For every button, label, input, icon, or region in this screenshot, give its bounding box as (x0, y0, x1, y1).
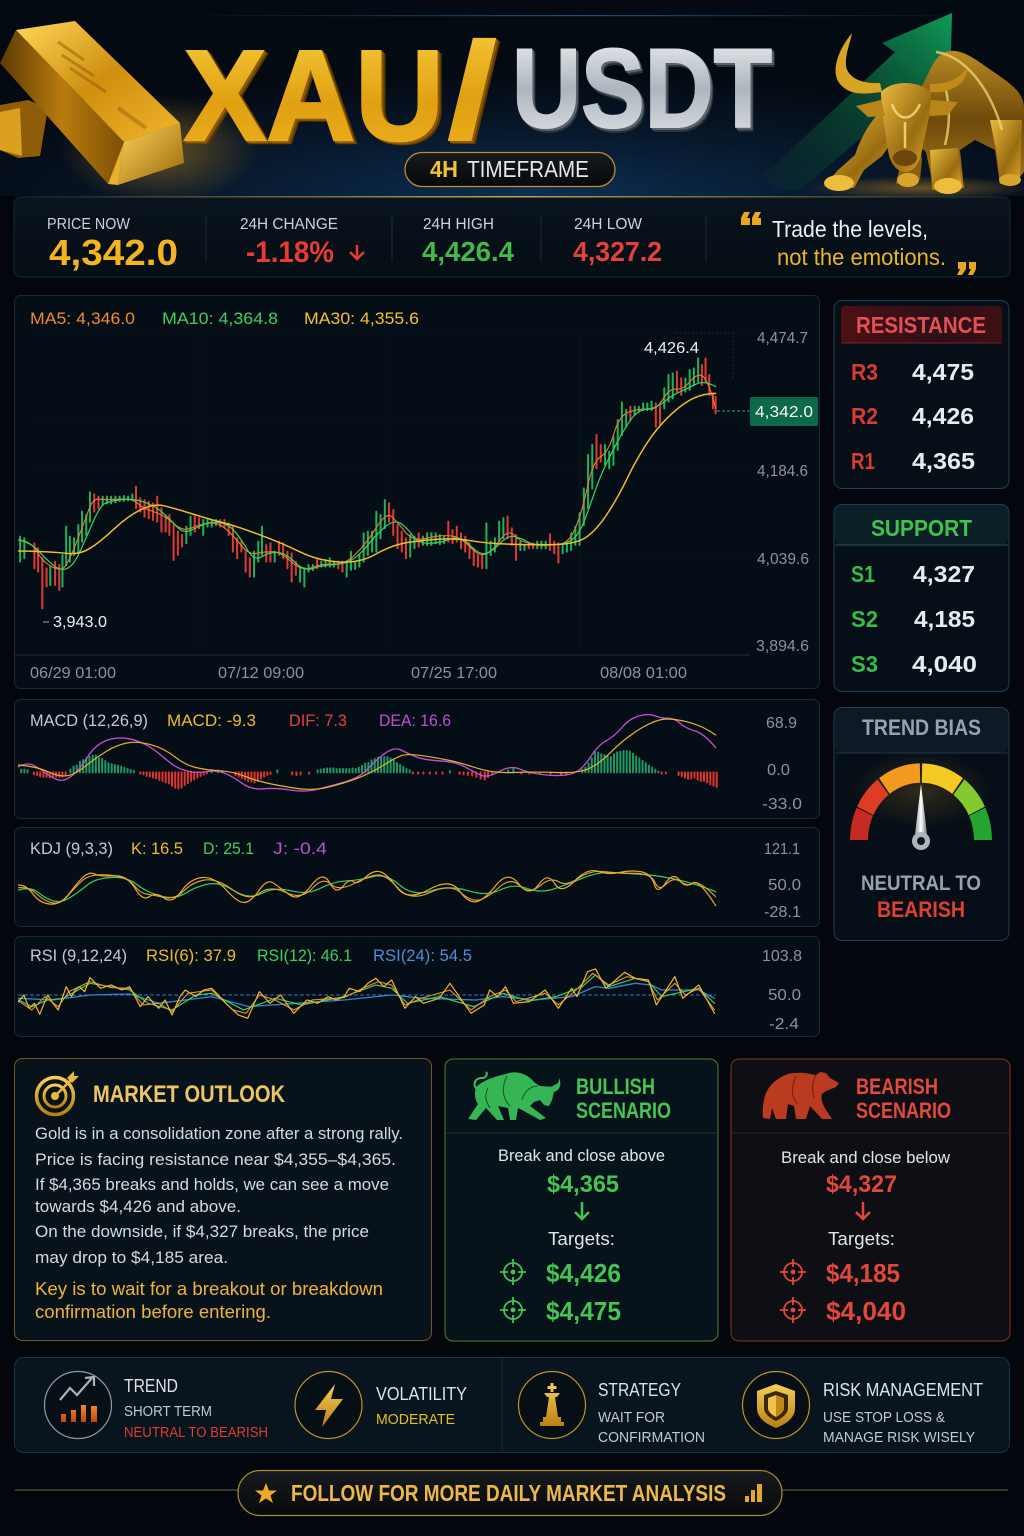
bullish trigger: Targets: (548, 1229, 615, 1249)
price axis: 4,039.6 (757, 551, 809, 568)
outlook body text: On the downside, if $4,327 breaks, the price (35, 1222, 369, 1241)
panel: resistance (834, 300, 1009, 488)
panel: RSI (14, 936, 820, 1036)
MACD legend: DEA: 16.6 (379, 711, 451, 730)
summary: volatility: VOLATILITY (376, 1384, 467, 1404)
panel: summary strip (14, 1358, 1010, 1452)
bullish trigger: $4,365 (547, 1171, 619, 1198)
summary: strategy: STRATEGY (598, 1380, 681, 1400)
icon: target (36, 1071, 79, 1114)
support levels: S1 (851, 561, 875, 587)
bullish target 1 (500, 1258, 621, 1288)
bearish trigger: $4,327 (826, 1171, 897, 1198)
KDJ legend: J: -0.4 (273, 839, 327, 858)
moving average legend: MA5: 4,346.0 (30, 309, 135, 328)
RSI axis: -2.4 (769, 1016, 799, 1033)
time axis (30, 665, 687, 682)
moving average legend: MA30: 4,355.6 (304, 309, 419, 328)
resistance heading: RESISTANCE (856, 312, 986, 338)
MACD legend: MACD: -9.3 (167, 711, 256, 730)
moving average legend (30, 309, 419, 328)
panel: KDJ (14, 828, 820, 926)
summary: risk management: MANAGE RISK WISELY (823, 1429, 975, 1446)
outlook heading: MARKET OUTLOOK (93, 1081, 286, 1108)
resistance levels (851, 359, 975, 474)
bullish heading: SCENARIO (576, 1098, 671, 1123)
bullish target 1: $4,426 (546, 1258, 621, 1288)
panel: MACD (14, 700, 820, 818)
KDJ legend: KDJ (9,3,3) (30, 839, 113, 858)
RSI legend: RSI(12): 46.1 (257, 946, 352, 965)
support levels (851, 561, 977, 677)
bullish heading: BULLISH (576, 1074, 655, 1099)
price axis (756, 330, 809, 655)
outlook body text: Gold is in a consolidation zone after a strong rally. (35, 1124, 403, 1143)
resistance levels: 4,365 (912, 448, 975, 474)
panel: support (834, 504, 1009, 692)
bearish target 1: $4,185 (826, 1258, 900, 1288)
stat: 24h high (422, 216, 514, 267)
stat: 24h low: 4,327.2 (573, 236, 662, 267)
RSI legend: RSI(24): 54.5 (373, 946, 472, 965)
panel: price chart (14, 296, 820, 688)
RSI axis: 103.8 (762, 948, 802, 965)
summary: strategy: CONFIRMATION (598, 1429, 705, 1446)
KDJ axis: 50.0 (768, 877, 801, 894)
outlook key note (35, 1279, 383, 1322)
bearish heading (856, 1074, 951, 1123)
resistance levels: 4,475 (912, 359, 974, 385)
bearish heading: BEARISH (856, 1074, 938, 1099)
summary: risk management: USE STOP LOSS & (823, 1409, 945, 1426)
bullish target 2: $4,475 (546, 1296, 621, 1326)
support levels: 4,040 (912, 651, 977, 677)
summary: risk management: RISK MANAGEMENT (823, 1380, 983, 1400)
panel: market outlook (14, 1058, 432, 1340)
MACD axis: 0.0 (767, 762, 790, 779)
stat: 24h change: -1.18% (246, 236, 334, 269)
stat: 24h low (573, 216, 662, 267)
outlook body text: may drop to $4,185 area. (35, 1248, 228, 1267)
header banner (0, 0, 1024, 205)
quote: Trade the levels, (772, 216, 928, 242)
summary: strategy: WAIT FOR (598, 1409, 665, 1426)
icon: small gold bar (0, 100, 48, 158)
MACD legend: DIF: 7.3 (289, 711, 347, 730)
icon: bars (745, 1484, 762, 1502)
RSI legend (30, 946, 472, 965)
current price tag (717, 397, 818, 426)
KDJ axis (764, 841, 801, 921)
bearish heading: SCENARIO (856, 1098, 951, 1123)
icon: green bull (468, 1072, 560, 1120)
summary: strategy (518, 1372, 705, 1446)
outlook body text (35, 1124, 403, 1267)
resistance levels: 4,426 (912, 403, 974, 429)
MACD legend (30, 711, 451, 730)
outlook body text: towards $4,426 and above. (35, 1197, 241, 1216)
KDJ chart (19, 871, 716, 906)
timeframe pill: TIMEFRAME (467, 156, 589, 182)
bearish target 2 (780, 1296, 906, 1326)
stat: 24h low: 24H LOW (574, 216, 643, 233)
bearish trigger: Targets: (828, 1229, 895, 1249)
footer call to action (15, 1470, 1008, 1516)
stat: price now (47, 216, 178, 273)
RSI chart (19, 969, 716, 1018)
current price tag: 4,342.0 (755, 404, 813, 421)
resistance heading (841, 306, 1002, 343)
bearish target 2: $4,040 (826, 1296, 906, 1326)
moving average legend: MA10: 4,364.8 (162, 309, 278, 328)
stat: price now: 4,342.0 (49, 232, 178, 273)
title: USDT: USDT (512, 26, 772, 151)
quote: not the emotions. (777, 244, 946, 270)
summary: risk management (742, 1372, 983, 1446)
MACD legend: MACD (12,26,9) (30, 711, 148, 730)
KDJ legend: K: 16.5 (131, 839, 183, 858)
MACD axis (762, 715, 802, 813)
title: / (448, 15, 496, 166)
KDJ legend (30, 839, 327, 858)
bullish trigger (498, 1146, 665, 1249)
panel: bearish scenario (731, 1059, 1010, 1341)
call to action text: FOLLOW FOR MORE DAILY MARKET ANALYSIS (291, 1480, 726, 1506)
RSI legend: RSI (9,12,24) (30, 946, 127, 965)
icon: green up arrow (764, 13, 952, 190)
panel: trend bias (834, 708, 1009, 940)
bull head (881, 83, 931, 172)
bullish heading (576, 1074, 671, 1123)
bull body (900, 51, 1024, 190)
high price label (644, 333, 733, 380)
summary: volatility (295, 1372, 467, 1438)
bearish target 1 (780, 1258, 900, 1288)
title: XAU (184, 24, 444, 168)
panel: bullish scenario (445, 1059, 718, 1341)
summary: trend: TREND (124, 1376, 178, 1396)
summary: trend (44, 1372, 268, 1441)
time axis: 06/29 01:00 (30, 665, 116, 682)
bearish trigger: Break and close below (781, 1148, 951, 1167)
stat: 24h change (240, 216, 364, 269)
quote (741, 212, 976, 275)
bullish target 2 (500, 1296, 621, 1326)
KDJ axis: -28.1 (764, 904, 801, 921)
time axis: 07/12 09:00 (218, 665, 304, 682)
bull horns (836, 33, 882, 94)
stats bar (14, 196, 1010, 277)
icon: golden bull (824, 33, 1024, 194)
gauge needle (912, 784, 930, 850)
trend bias verdict: NEUTRAL TO (861, 872, 981, 895)
trend bias verdict: BEARISH (877, 897, 965, 922)
KDJ axis: 121.1 (764, 841, 800, 858)
low price label: 3,943.0 (53, 614, 107, 631)
price axis: 3,894.6 (756, 638, 809, 655)
MACD chart (19, 715, 717, 791)
candlesticks and moving averages (19, 358, 716, 608)
gauge (851, 752, 991, 850)
price axis: 4,184.6 (757, 463, 808, 480)
resistance levels: R1 (851, 448, 875, 474)
KDJ legend: D: 25.1 (203, 839, 254, 858)
outlook key note: Key is to wait for a breakout or breakdown (35, 1279, 383, 1299)
RSI axis (762, 948, 802, 1033)
timeframe pill: 4H (430, 156, 458, 182)
support heading: SUPPORT (871, 515, 972, 541)
outlook body text: If $4,365 breaks and holds, we can see a move (35, 1175, 389, 1194)
RSI legend: RSI(6): 37.9 (146, 946, 236, 965)
icon: large gold bar (0, 21, 184, 185)
outlook key note: confirmation before entering. (35, 1302, 271, 1322)
trend bias heading: TREND BIAS (862, 715, 981, 740)
MACD axis: -33.0 (762, 796, 802, 813)
MACD axis: 68.9 (766, 715, 797, 732)
summary: trend: SHORT TERM (124, 1403, 212, 1420)
high price label: 4,426.4 (644, 340, 699, 357)
support levels: S2 (851, 606, 878, 632)
summary: trend: NEUTRAL TO BEARISH (124, 1424, 268, 1441)
time axis: 07/25 17:00 (411, 665, 497, 682)
timeframe pill (405, 152, 615, 186)
summary: volatility: MODERATE (376, 1411, 455, 1428)
bearish trigger (781, 1148, 951, 1249)
stat: 24h high: 24H HIGH (423, 216, 494, 233)
resistance levels: R3 (851, 359, 878, 385)
icon: red bear (763, 1072, 839, 1119)
resistance levels: R2 (851, 403, 878, 429)
stat: 24h change: 24H CHANGE (240, 216, 338, 233)
support levels: S3 (851, 651, 878, 677)
support levels: 4,185 (914, 606, 975, 632)
bullish trigger: Break and close above (498, 1146, 665, 1165)
stat: price now: PRICE NOW (47, 216, 131, 233)
support levels: 4,327 (913, 561, 975, 587)
price axis: 4,474.7 (757, 330, 808, 347)
outlook body text: Price is facing resistance near $4,355–$4,365. (35, 1150, 396, 1169)
icon: star (255, 1483, 277, 1503)
trend bias verdict (861, 872, 981, 922)
RSI axis: 50.0 (768, 987, 801, 1004)
stat: 24h high: 4,426.4 (422, 236, 514, 267)
time axis: 08/08 01:00 (600, 665, 687, 682)
